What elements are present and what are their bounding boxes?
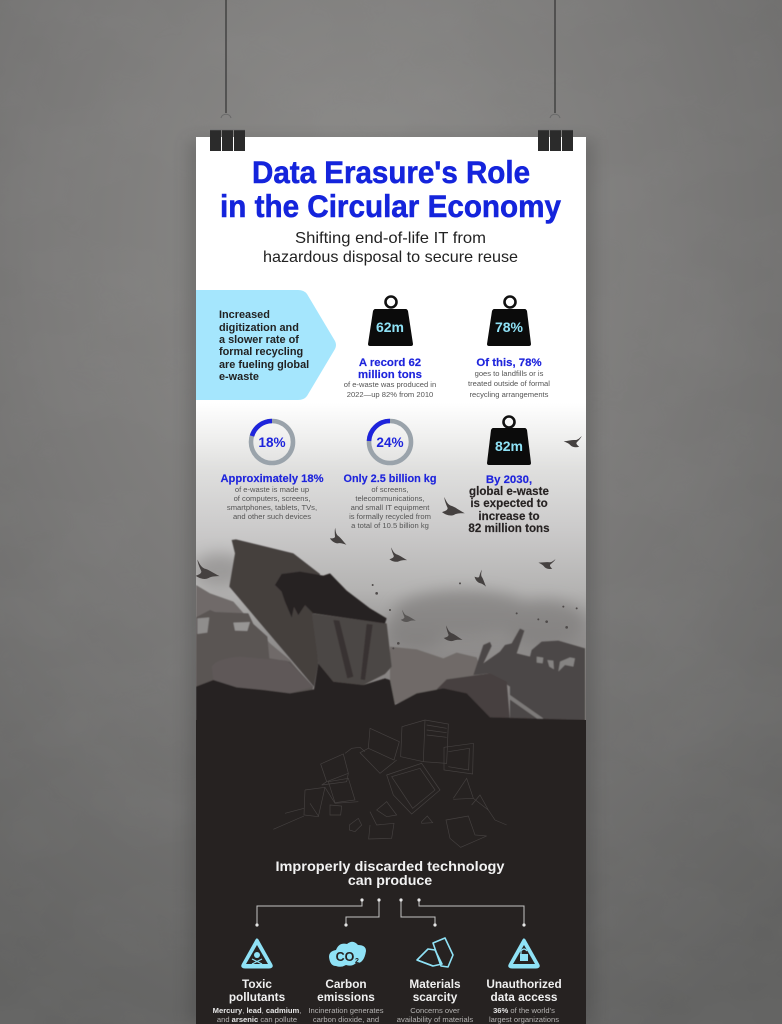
stat: 78 percent: 78% [495,319,524,335]
stat: 18 percent donut: 18% [258,435,286,450]
column: carbon emissions: carbon dioxide, and [313,1015,379,1024]
stat: 62 million tons: A record 62 [359,357,421,369]
stat: 82 million tons by 2030 [468,416,550,535]
stat: 18 percent donut [220,421,324,521]
heading: improperly discarded technology: Improperly discarded technology [276,859,505,875]
subtitle [263,230,518,266]
stat: 24 percent donut: a total of 10.5 billion kg [351,521,429,530]
distant hills [196,584,296,668]
column: materials scarcity [397,938,473,1024]
panel: intro callout: are fueling global [219,359,309,371]
icon: metal bars [417,938,453,967]
stat: 24 percent donut: telecommunications, [355,494,425,503]
stat: 18 percent donut: of computers, screens, [234,494,310,503]
birds [194,433,582,644]
binder clips [210,129,573,151]
icon: CO2 cloud: 2 [355,958,359,965]
stat: 24 percent donut: Only 2.5 billion kg [344,473,437,485]
title: in the Circular Economy [220,188,561,224]
column: materials scarcity: Materials [409,977,461,991]
column: carbon emissions: Incineration generates [308,1006,384,1015]
stat: 78 percent: Of this, 78% [476,357,542,369]
debris specks [372,582,578,649]
illustration: pile of discarded technology [273,720,507,847]
icon: open lock triangle [510,940,538,967]
column: unauthorized data access [486,940,562,1024]
stat: 24 percent donut: and small IT equipment [351,503,430,512]
column: materials scarcity: Concerns over [410,1006,460,1015]
column: carbon emissions [308,942,384,1024]
stat: 82 million tons by 2030: By 2030, [486,474,532,486]
smoke [193,553,587,650]
column: unauthorized data access: largest organizations [489,1015,559,1024]
column: toxic pollutants [213,940,301,1024]
cube [349,818,362,832]
stat: 82 million tons by 2030: is expected to [470,497,548,510]
stat: 78 percent: goes to landfills or is [475,369,544,378]
icon: CO2 cloud [329,942,366,967]
heading: improperly discarded technology: can produce [348,873,432,889]
title [220,154,561,224]
illustration: landfill scene [193,539,587,737]
stat: 62 million tons: 62m [376,319,404,335]
stat: 82 million tons by 2030: 82m [495,438,523,454]
stat: 82 million tons by 2030: global e-waste [469,485,549,498]
wires left [273,808,304,829]
column: unauthorized data access: data access [491,990,558,1004]
stat: 82 million tons by 2030: increase to [478,510,540,523]
stat: 24 percent donut: 24% [376,435,404,450]
stat: 18 percent donut: Approximately 18% [220,473,324,485]
panel: intro callout: formal recycling [219,346,303,358]
column: toxic pollutants: and arsenic can pollute [217,1015,297,1024]
printer box [387,763,440,814]
panel: intro callout [196,290,336,400]
monitor [444,743,473,774]
lock item [422,816,433,823]
laptop top [360,728,399,773]
boxes [304,778,358,817]
stat: 82 million tons by 2030: 82 million tons [468,522,550,535]
title: Data Erasure's Role [252,154,530,190]
ground [196,664,585,720]
subtitle: Shifting end-of-life IT from [295,230,486,247]
bottom laptop [446,816,487,847]
stat: 78 percent: treated outside of formal [468,379,550,388]
hanging wires [221,0,560,118]
tower [401,720,448,763]
dirt load [275,572,387,623]
back excavator [196,610,313,697]
right rubble [453,778,507,825]
column: unauthorized data access: 36% of the world's [493,1006,555,1015]
left laptop [321,754,348,785]
stat: 62 million tons: million tons [358,369,422,381]
icon: CO2 cloud: CO [336,950,355,964]
column: toxic pollutants: Toxic [242,977,272,991]
connectors [255,898,526,927]
column: toxic pollutants: Mercury, lead, cadmium, [213,1006,301,1015]
heading: improperly discarded technology [276,859,505,889]
stat: 24 percent donut: is formally recycled from [349,512,431,521]
poster sheet [196,137,586,1024]
stat: 62 million tons [344,296,436,399]
panel: intro callout: e-waste [219,371,259,383]
stat: 62 million tons: of e-waste was produced in [344,380,436,389]
column: toxic pollutants: pollutants [229,990,286,1004]
dark lower panel [196,720,586,1024]
stat: 24 percent donut: of screens, [371,485,409,494]
small laptop [369,802,397,839]
column: unauthorized data access: Unauthorized [486,977,562,991]
icon: toxic warning triangle [243,940,271,967]
truck bed [229,539,320,687]
stat: 18 percent donut: of e-waste is made up [235,485,309,494]
column: carbon emissions: Carbon [325,977,367,991]
stat: 18 percent donut: smartphones, tablets, TVs, [227,503,317,512]
column: materials scarcity: scarcity [413,990,458,1004]
subtitle: hazardous disposal to secure reuse [263,249,518,266]
column: carbon emissions: emissions [317,990,375,1004]
panel: intro callout: Increased [219,309,270,321]
stat: 24 percent donut [344,421,437,530]
stat: 78 percent: recycling arrangements [470,390,549,399]
stat: 18 percent donut: and other such devices [233,512,311,521]
panel: intro callout: digitization and [219,322,299,334]
panel: intro callout: a slower rate of [219,334,299,346]
stat: 62 million tons: 2022—up 82% from 2010 [347,390,433,399]
column: materials scarcity: availability of materials [397,1015,473,1024]
right bulldozer [473,629,585,721]
stat: 78 percent [468,296,550,399]
